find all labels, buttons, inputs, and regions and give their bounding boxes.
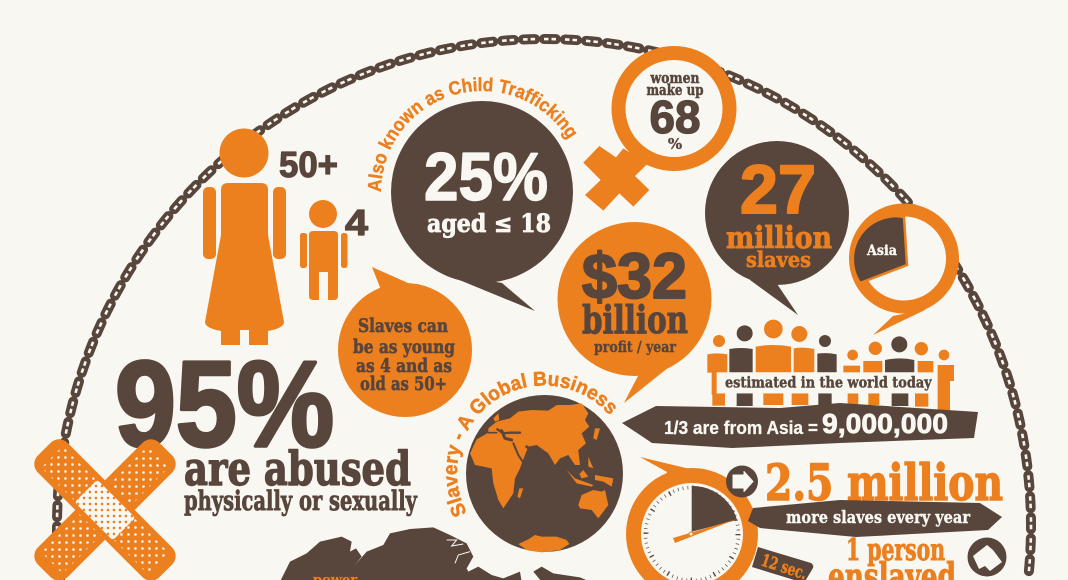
clock with 12 second wedge — [634, 457, 750, 580]
speech bubble: 25% aged 18 or under — [391, 101, 573, 311]
speech bubble: 27 million slaves: slaves — [746, 247, 811, 272]
speech bubble: 27 million slaves: million — [726, 221, 832, 256]
speech bubble: age range of slaves — [338, 267, 472, 417]
caption: are abused: are abused — [184, 442, 411, 497]
banner: more slaves every year — [748, 500, 1002, 537]
banner: more slaves every year: more slaves every year — [786, 508, 971, 528]
speech bubble: 32 billion profit: billion — [582, 297, 688, 342]
icon: female symbol — [583, 53, 730, 211]
caption: physically or sexually: physically or sexually — [184, 486, 418, 517]
banner: one third from Asia: 1/3 are from Asia = — [664, 418, 818, 438]
icon: female symbol: % — [668, 135, 682, 153]
speech bubble: age range of slaves: as 4 and as — [356, 355, 452, 377]
banner: one third from Asia — [622, 403, 978, 448]
icon: crossed bandage — [29, 434, 181, 580]
statistic: 2.5 million: 2.5 million — [765, 453, 1003, 512]
icon: female symbol: women — [650, 69, 700, 87]
statistic: 1 person enslaved: 1 person — [846, 533, 945, 568]
brown map shapes — [280, 527, 590, 580]
figure: child aged 4 — [300, 200, 348, 300]
speech bubble: age range of slaves: be as young — [353, 336, 455, 358]
speech bubble: 32 billion profit — [558, 222, 712, 403]
statistic: 1 person enslaved — [828, 533, 956, 580]
curved caption: also known as child trafficking: Also known as Child Trafficking — [368, 77, 576, 192]
icon: female symbol: 68 — [650, 91, 700, 143]
speech bubble: 32 billion profit: $32 — [582, 240, 687, 312]
speech bubble: 27 million slaves — [705, 141, 849, 315]
speech bubble: age range of slaves: old as 50+ — [360, 373, 447, 395]
label: 50+: 50+ — [279, 144, 338, 185]
pie chart bubble: share from Asia — [853, 210, 952, 335]
icon: female symbol: make up — [646, 81, 704, 99]
speech bubble: 27 million slaves: 27 — [740, 151, 816, 228]
speech bubble: 25% aged 18 or under: 25% — [424, 139, 548, 215]
people row — [707, 320, 954, 411]
statistic: 95%: 95% — [115, 336, 334, 472]
banner: one third from Asia: 9,000,000 — [822, 408, 948, 439]
curved caption: slavery a global business: Slavery - A Global Business — [446, 372, 616, 517]
speech bubble: age range of slaves: Slaves can — [358, 315, 448, 337]
figure: woman aged 50+ — [203, 128, 286, 345]
label: 4: 4 — [345, 202, 368, 243]
speech bubble: 32 billion profit: profit / year — [594, 338, 677, 356]
icon: right arrow in circle — [726, 466, 758, 498]
pie chart bubble: share from Asia: Asia — [866, 243, 897, 259]
speech bubble: 25% aged 18 or under: aged ≤ 18 — [427, 209, 551, 238]
globe — [466, 395, 623, 552]
people row: estimated in the world today — [725, 373, 933, 391]
icon: up-left arrow in circle — [968, 538, 1006, 576]
tag: 12 sec — [752, 547, 813, 580]
